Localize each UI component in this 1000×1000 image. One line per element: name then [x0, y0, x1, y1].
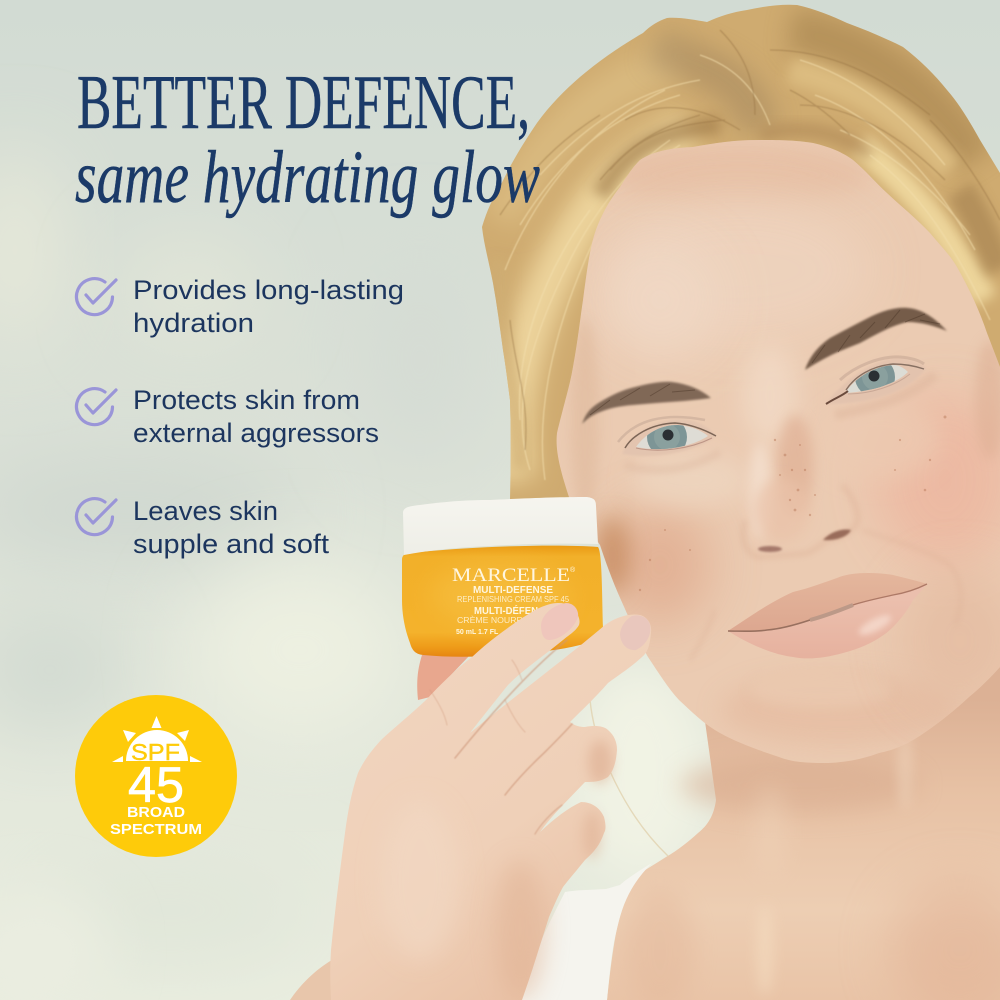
jar body	[402, 546, 603, 657]
smile crease	[690, 530, 961, 660]
benefit 2: external aggressors	[133, 418, 379, 448]
freckles	[639, 416, 946, 591]
jar label	[452, 565, 576, 636]
hand	[330, 603, 651, 1000]
badge: SPF 45	[75, 695, 237, 857]
badge: SPF 45: SPECTRUM	[110, 822, 202, 838]
benefit 3: supple and soft	[133, 529, 330, 559]
arm behind hand	[290, 960, 332, 1000]
title: same hydrating glow	[75, 136, 540, 219]
benefit 3	[77, 496, 330, 559]
hand thumb behind jar	[417, 655, 470, 700]
benefit 1: hydration	[133, 308, 254, 338]
title: BETTER DEFENCE,	[77, 59, 530, 145]
lips	[728, 573, 927, 658]
fingernails	[541, 603, 578, 640]
badge: SPF 45: 45	[128, 757, 184, 813]
cream jar	[402, 497, 603, 657]
jar label: 50 mL 1.7 FL	[456, 629, 499, 636]
benefit 1: Provides long-lasting	[133, 275, 404, 305]
icon: check circle	[77, 499, 116, 535]
badge: SPF 45: BROAD	[127, 805, 185, 821]
nose	[743, 415, 858, 557]
jar label: CRÈME NOURRIS	[457, 615, 531, 625]
benefit 3: Leaves skin	[133, 496, 278, 526]
jar label: MULTI-DÉFEN	[474, 604, 538, 617]
face	[557, 140, 1000, 763]
right eyebrow	[805, 308, 947, 370]
jar label: ®	[570, 566, 576, 574]
left eye	[618, 417, 716, 457]
hair back strand	[590, 700, 668, 856]
benefit 2: Protects skin from	[133, 385, 360, 415]
title	[75, 59, 540, 219]
icon: check circle	[77, 389, 116, 425]
hair	[470, 0, 1000, 520]
right eye	[826, 357, 926, 404]
tank top strap	[516, 863, 652, 1000]
shoulder and neck	[607, 640, 1000, 1000]
finger shading	[430, 640, 572, 834]
icon: sun	[112, 716, 202, 762]
badge: SPF 45: SPF	[131, 739, 180, 765]
hair strands	[500, 30, 1000, 480]
benefit 2	[77, 385, 379, 448]
jar lid	[403, 497, 598, 555]
jar label: REPLENISHING CREAM SPF 45	[457, 594, 569, 604]
left eyebrow	[582, 382, 711, 424]
jar label: MULTI-DEFENSE	[473, 585, 553, 596]
jar label: MARCELLE	[452, 565, 570, 586]
ear	[515, 436, 559, 504]
icon: check circle	[77, 279, 116, 315]
benefit 1	[77, 275, 404, 338]
